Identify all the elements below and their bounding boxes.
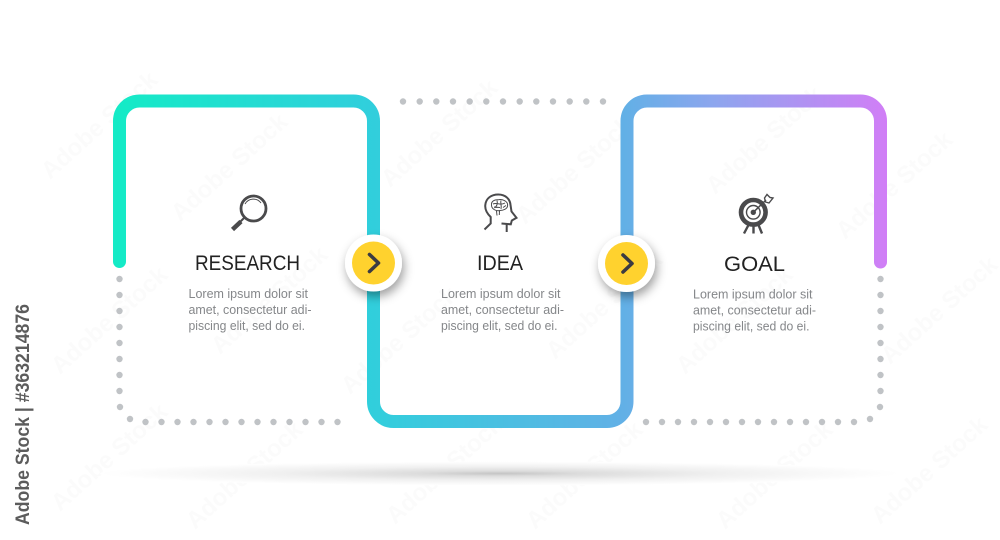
dotted connector: bottom right: [643, 276, 884, 425]
watermark: Adobe Stock: [181, 416, 309, 534]
text block: idea: [441, 287, 564, 333]
watermark: Adobe Stock: [46, 398, 174, 516]
watermark: Adobe Stock: [206, 241, 334, 359]
watermark: Adobe Stock: [671, 261, 799, 379]
text block: goal: amet, consectetur adi-: [693, 304, 816, 318]
watermark: Adobe Stock: [36, 66, 164, 184]
text block: research: Lorem ipsum dolor sit: [188, 287, 309, 301]
watermark: Adobe Stock: [376, 74, 504, 192]
watermark: Adobe Stock: [381, 411, 509, 529]
watermark: Adobe Stock: [701, 81, 829, 199]
text block: goal: piscing elit, sed do ei.: [693, 320, 810, 334]
watermark: Adobe Stock: [541, 246, 669, 364]
icon: magnifying glass: [232, 196, 266, 230]
watermark: Adobe Stock: [336, 281, 464, 399]
text block: goal: [693, 288, 816, 334]
panel: idea: [441, 194, 564, 333]
watermark: Adobe Stock: [711, 416, 839, 534]
text block: research: [188, 287, 312, 333]
stock id caption: Adobe Stock | #363214876: [13, 304, 34, 525]
text block: idea: amet, consectetur adi-: [441, 303, 564, 317]
watermark: Adobe Stock: [831, 126, 959, 244]
heading: research: RESEARCH: [195, 252, 300, 275]
heading: goal: GOAL: [724, 253, 785, 276]
heading: idea: IDEA: [477, 252, 523, 275]
watermark: Adobe Stock: [46, 261, 174, 379]
dotted connector: bottom left: [116, 276, 341, 425]
panel: research: [188, 196, 312, 333]
watermark: Adobe Stock: [511, 111, 639, 229]
icon: head with brain: [484, 194, 516, 232]
watermark: Adobe Stock: [876, 251, 1000, 369]
gradient timeline line: [120, 101, 880, 422]
ground shadow: [100, 462, 900, 486]
arrow button: idea to goal: [598, 235, 655, 292]
text block: goal: Lorem ipsum dolor sit: [693, 288, 813, 302]
watermark: Adobe Stock: [866, 411, 994, 529]
text block: idea: piscing elit, sed do ei.: [441, 319, 558, 333]
text block: research: amet, consectetur adi-: [188, 303, 312, 317]
watermark: Adobe Stock: [166, 108, 294, 226]
text block: idea: Lorem ipsum dolor sit: [441, 287, 561, 301]
dotted connector: top middle: [400, 98, 606, 105]
watermark: Adobe Stock: [521, 416, 649, 534]
icon: target with arrow: [741, 194, 773, 234]
arrow button: research to idea: [345, 234, 402, 292]
text block: research: piscing elit, sed do ei.: [188, 319, 305, 333]
panel: goal: [693, 194, 816, 334]
